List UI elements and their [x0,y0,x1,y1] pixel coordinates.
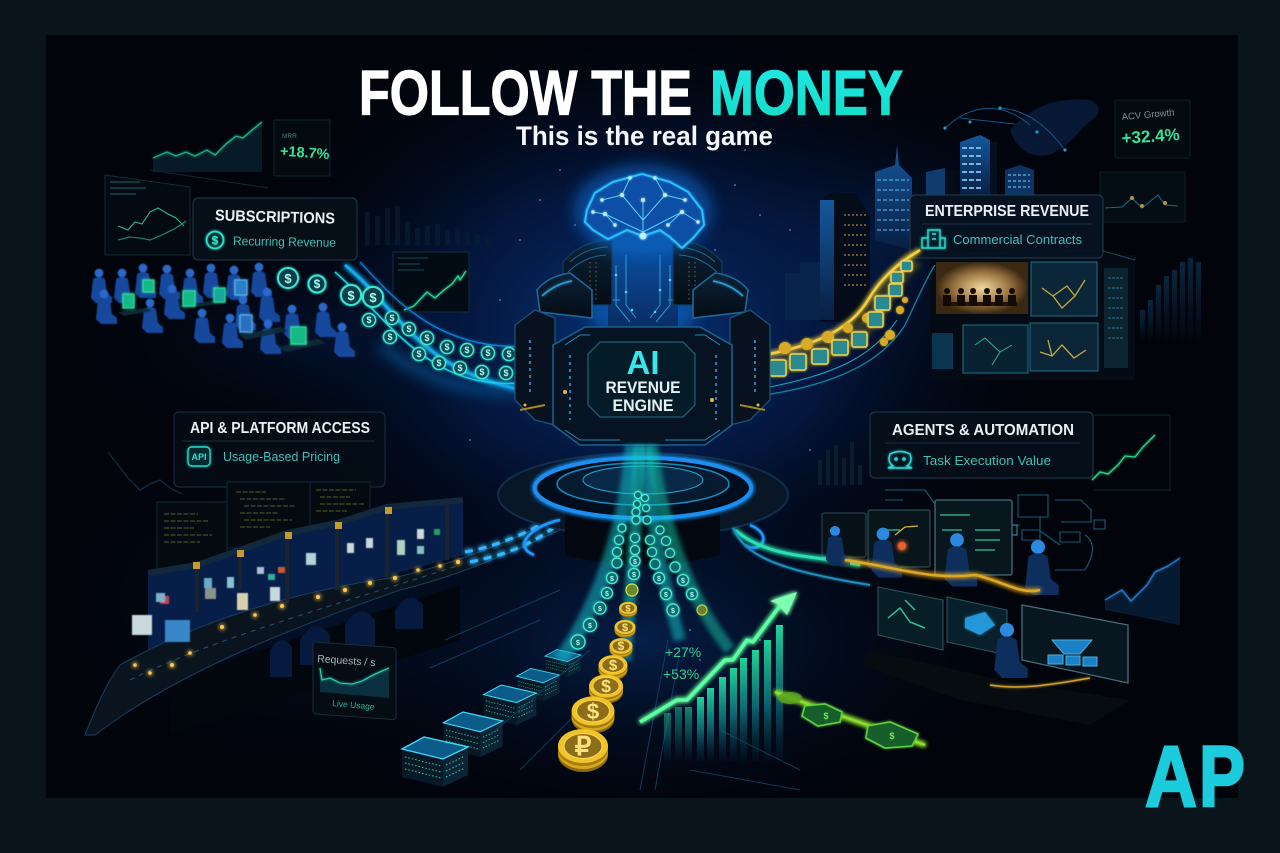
agents workstation [733,500,1130,725]
green bill stream: $ [823,711,829,721]
gantry beam [148,500,463,573]
logo: AP: A [1145,729,1197,825]
growth percentages: +53% [663,666,699,682]
subscription coin stream: $ [464,345,470,355]
requests live usage panel: Live Usage [332,698,375,712]
subscription coin stream: $ [347,288,355,303]
panel: agents & automation [870,412,1093,478]
panel: enterprise revenue: ENTERPRISE REVENUE [925,203,1089,220]
panel: API & platform access: Usage-Based Pricing [223,449,340,464]
gold coin stack: $ [601,676,611,696]
green growth chart panel [393,252,469,312]
icon: API badge [188,447,210,466]
API bridge with gantries [85,500,560,735]
panel: API & platform access [174,412,385,487]
engine base platform [498,453,788,565]
panel: agents & automation: Task Execution Value [923,453,1051,468]
central coin streams: $ [598,606,602,613]
gold coin stack [558,602,637,772]
building windows [932,333,953,369]
gold coin stack: $ [587,699,600,724]
logo: AP [1145,729,1245,825]
central coin streams: $ [664,592,668,599]
main engine body [515,310,770,445]
central coin streams: $ [605,591,609,598]
panel: enterprise revenue [910,195,1103,258]
central coin streams [560,440,730,660]
gold coin stack: $ [618,639,625,653]
gold data flow [845,560,1040,591]
subscribers crowd [91,263,355,357]
bars right [1140,258,1201,340]
title: MONEY [710,58,903,128]
icon: API badge: API [191,452,207,462]
central coin streams: $ [632,572,636,579]
engine label panel [588,342,695,417]
workflow diagram [885,490,1105,570]
background glow [60,30,1080,830]
star particles [469,149,811,691]
icon: recurring dollar: $ [212,234,219,248]
logo: AP: P [1199,729,1245,825]
enterprise building [930,250,1135,380]
gold coin stack: $ [609,657,618,674]
central coin streams: $ [576,640,580,647]
agents chart upper right [1092,415,1170,490]
title: FOLLOW THE [359,58,692,128]
MRR stat panel: MRR [282,133,297,140]
network screens [963,262,1098,373]
central coin streams: $ [657,576,661,583]
subscription coin stream: $ [406,324,412,334]
API app cards [132,529,440,642]
central coin streams: $ [610,576,614,583]
road lights [133,560,460,675]
subscription coin stream: $ [314,277,321,291]
subscription coin stream: $ [416,349,422,359]
subscription coin stream: $ [389,313,395,323]
central coin streams: $ [671,608,675,615]
upper screens [822,500,1012,575]
subscription coin stream: $ [503,368,509,378]
icon: office building [922,230,945,248]
subscription coin stream: $ [424,333,430,343]
subscription coin stream: $ [369,290,377,305]
panel: agents & automation: AGENTS & AUTOMATION [892,422,1074,439]
code screens [157,482,370,570]
central coin streams: $ [633,559,637,566]
engine label panel: REVENUE [606,379,680,397]
MRR stat panel [274,120,330,176]
green data flow [735,530,860,565]
subscription coin stream: $ [485,348,491,358]
node chart panel upper right [1100,172,1185,222]
desk floor [860,650,1130,725]
upper rings [537,240,748,318]
background chart: MRR trend [150,122,268,188]
subscription coin stream: $ [387,332,393,342]
ACV growth stat panel: ACV Growth [1121,107,1175,123]
icon: recurring dollar [206,232,224,248]
enterprise gold chain stream [765,250,935,395]
ACV growth stat panel [1115,100,1190,158]
growth percentages [663,644,701,682]
engine label panel: AI [626,344,660,381]
central coin streams: $ [690,592,694,599]
server stacks [402,650,581,787]
subscription coin stream: $ [457,363,463,373]
circuit floor lines [430,590,800,790]
requests live usage panel [313,642,396,720]
growth percentages: +27% [665,644,701,660]
panel: subscriptions: Recurring Revenue [233,234,336,250]
subscription coin stream: $ [479,367,485,377]
ACV growth stat panel: +32.4% [1121,125,1180,148]
bright column below engine [634,440,652,510]
gold coin stack: $ [625,603,631,613]
subscription coin stream: $ [366,315,372,325]
agents stock chart [1105,558,1180,625]
subscription coin stream: $ [436,358,442,368]
engine label panel: ENGINE [612,397,674,415]
core circuitry [581,225,705,345]
central coin streams: $ [588,623,592,630]
subtitle: This is the real game [516,121,773,151]
icon: agent robot [888,452,912,468]
faint stock line left [108,452,182,494]
growth arrow [640,592,797,722]
green bill stream [775,692,925,748]
gold coin stack: $ [622,622,628,634]
brain network icon [573,164,713,328]
world map network [943,99,1099,156]
subscription coin stream: $ [444,342,450,352]
subscription coin stream: $ [506,349,512,359]
gold coin stack: ₽ [575,731,592,761]
subscription coin stream [278,262,535,392]
green bill stream: $ [889,731,895,741]
central coin streams: $ [681,578,685,585]
lower screens [878,587,1128,683]
requests live usage panel: Requests / s [317,653,376,669]
revenue line chart panel [105,175,190,255]
subscription coin stream: $ [284,271,292,286]
panel: enterprise revenue: Commercial Contracts [953,232,1082,247]
skyline [785,135,1034,322]
panel: API & platform access: API & PLATFORM ACCESS [190,420,370,437]
faint bars behind subscriptions [365,206,490,245]
faint bars mid right [818,442,862,485]
agents [826,526,1059,595]
panel: subscriptions [193,198,357,260]
MRR stat panel: +18.7% [279,144,330,163]
AI revenue engine [515,225,770,445]
panel: subscriptions: SUBSCRIPTIONS [215,207,335,228]
growth bars [664,625,783,763]
conference room window [936,262,1028,314]
